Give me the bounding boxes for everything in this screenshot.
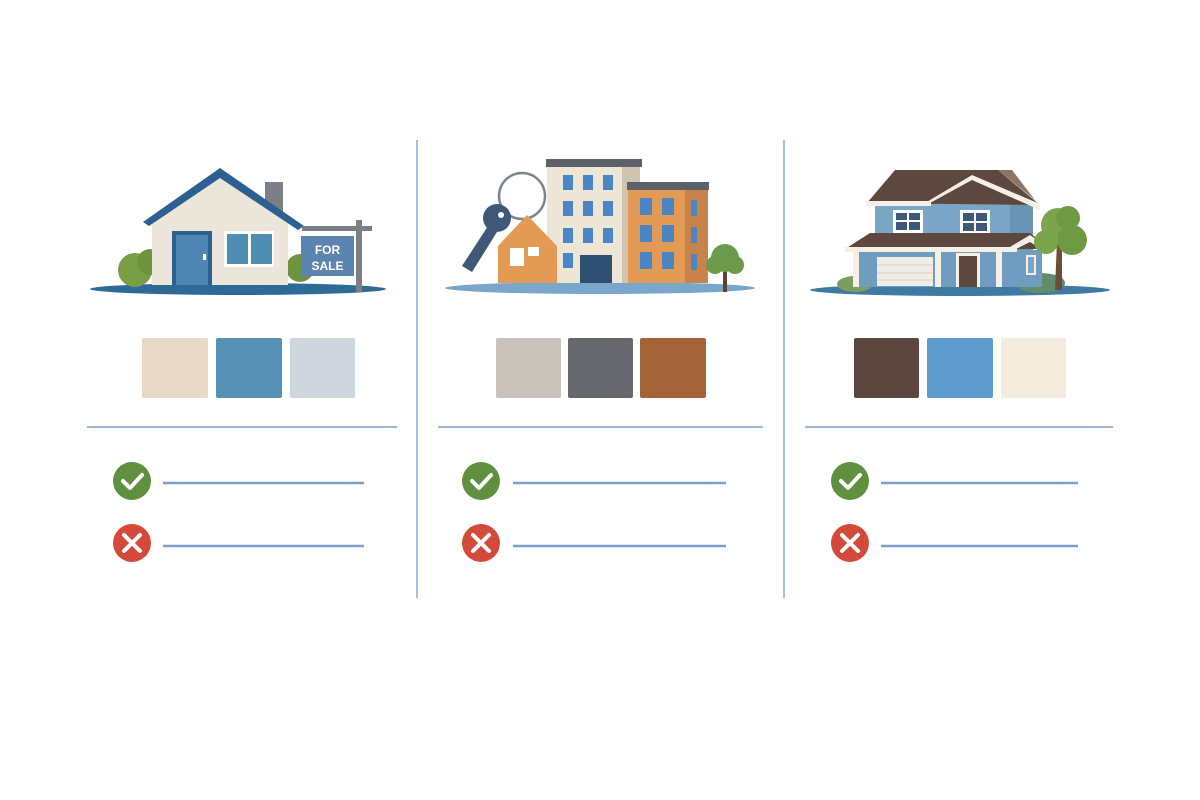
color swatches	[854, 338, 1066, 398]
pro item	[831, 462, 1078, 500]
icon: house for sale: SALE	[311, 259, 344, 273]
icon: two-story house	[810, 170, 1110, 296]
panel: apartments	[438, 159, 763, 562]
color swatches	[496, 338, 706, 398]
con item	[113, 524, 364, 562]
icon: house for sale: FOR	[315, 243, 340, 257]
panel: suburban house	[805, 170, 1113, 562]
pro item	[113, 462, 364, 500]
icon: apartment buildings with key	[445, 159, 755, 294]
icon: house for sale	[90, 168, 386, 295]
panel: house for sale	[87, 168, 397, 562]
con item	[462, 524, 726, 562]
color swatches	[142, 338, 355, 398]
pro item	[462, 462, 726, 500]
con item	[831, 524, 1078, 562]
